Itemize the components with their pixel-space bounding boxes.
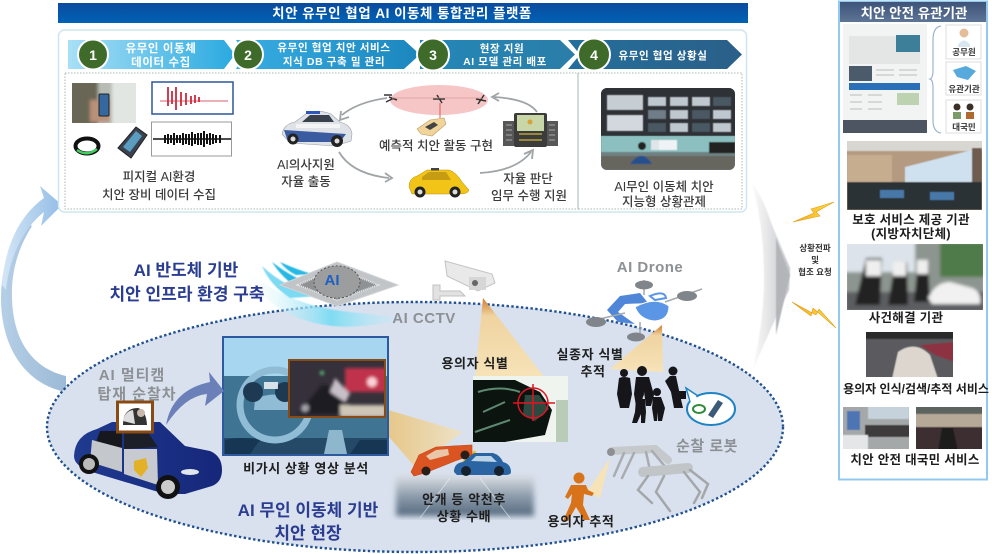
- inset: night scene video: [289, 360, 387, 417]
- text: AI chip heading: AI 반도체 기반: [134, 261, 239, 280]
- chart: black waveform: [152, 122, 232, 156]
- icon: AI chip: [280, 262, 398, 306]
- agencies header: [840, 2, 986, 22]
- text: physical AI: [102, 170, 216, 202]
- card: related agency: 유관기관: [948, 84, 980, 94]
- label: multicam patrol car: 탑재 순찰차: [97, 386, 177, 403]
- step 1 chevron: 1: [89, 47, 97, 63]
- label: field title: AI 무인 이동체 기반: [238, 501, 379, 520]
- text: loop labels: AI의사지원: [277, 158, 335, 172]
- text: protection service: [852, 212, 970, 241]
- text: physical AI: 치안 장비 데이터 수집: [102, 188, 216, 202]
- text: case resolution: 사건해결 기관: [869, 310, 943, 325]
- text: AI chip heading: 치안 인프라 환경 구축: [110, 285, 264, 304]
- text: situation relay: 및: [811, 255, 819, 265]
- step 2 chevron: 유무인 협업 치안 서비스: [277, 41, 391, 54]
- image: citizen service 2: [916, 407, 982, 449]
- text: situation relay: 협조 요청: [798, 267, 832, 277]
- text: control room label: 지능형 상황관제: [622, 194, 706, 209]
- label: field title: 치안 현장: [274, 524, 342, 543]
- icon: drone: [586, 280, 702, 372]
- text: situation relay: 상황전파: [799, 243, 831, 253]
- label: suspect id: 용의자 식별: [441, 356, 509, 371]
- step 3 chevron: 3: [429, 47, 437, 63]
- image: hand with phone: [72, 83, 136, 123]
- arrow: car to dashboard: [166, 372, 224, 425]
- text: loop labels: 예측적 치안 활동 구현: [379, 138, 493, 153]
- cone: dashboard to accident: [370, 410, 463, 467]
- label: bad weather: 안개 등 악천후: [422, 492, 506, 507]
- step 1 chevron: [68, 40, 235, 70]
- diagram: predictive policing loop: [277, 85, 567, 203]
- icon: crash cars: [411, 445, 511, 476]
- card: public official: [946, 25, 981, 59]
- icon: drones: [384, 95, 486, 118]
- arrows: loop arrows: [339, 93, 537, 182]
- icon: control device: [503, 113, 558, 147]
- image: suspect target: [473, 376, 568, 442]
- step 4 chevron: 유무인 협업 상황실: [618, 49, 708, 62]
- step 3 chevron: [417, 38, 575, 70]
- icon: CCTV: [433, 261, 495, 300]
- text: loop labels: 자율 판단: [503, 172, 553, 186]
- text: situation relay: [798, 243, 832, 277]
- step 2 chevron: 지식 DB 구축 밀 관리: [283, 55, 385, 68]
- robot 2: [638, 468, 708, 511]
- label: missing person: 추적: [580, 364, 606, 379]
- decoration: cyan waves: [240, 262, 405, 327]
- icon: small taxi: [417, 118, 446, 136]
- image: in-car dashboard: [223, 337, 388, 455]
- text: suspect service: 용의자 인식/검색/추적 서비스: [843, 382, 989, 396]
- label: missing person: 실종자 식별: [556, 347, 624, 362]
- label: bad weather: [422, 492, 506, 524]
- step 4 chevron: [568, 38, 742, 70]
- arrow: blue curved arrow from field to platform: [1, 186, 66, 392]
- text: loop labels: 임무 수행 지원: [491, 188, 567, 203]
- text: citizen service: 치안 안전 대국민 서비스: [850, 453, 980, 467]
- card: citizens: 대국민: [952, 122, 976, 132]
- card: public official: 공무원: [952, 47, 976, 57]
- step 4 chevron: 4: [590, 47, 598, 63]
- icon: AI chip: AI: [324, 272, 340, 289]
- label: patrol robot: 순찰 로봇: [676, 438, 738, 455]
- image: portal screenshot: [843, 24, 927, 133]
- image: citizen service 1: [843, 407, 909, 449]
- label: field title: [238, 501, 379, 543]
- icon: yellow autonomous car: [409, 168, 469, 198]
- label: multicam patrol car: AI 멀티캠: [99, 366, 165, 384]
- brace: [930, 26, 941, 133]
- robot 1: [607, 448, 668, 478]
- text: loop labels: [277, 138, 567, 203]
- title bar: [58, 3, 748, 23]
- icon: patrol robots: [607, 448, 708, 511]
- cone: CCTV view: [475, 298, 545, 378]
- title bar: 치안 유무인 협업 AI 이동체 통합관리 플랫폼: [272, 6, 532, 21]
- icon: orange running person: [563, 472, 594, 521]
- step 1 chevron: 유무인 이동체: [126, 42, 196, 55]
- image: operations center: [845, 139, 985, 212]
- label: bad weather: 상황 수배: [437, 509, 491, 524]
- text: control room label: AI무인 이동체 치안: [614, 180, 714, 194]
- text: AI chip heading: [110, 261, 264, 304]
- step 2 chevron: 2: [244, 47, 252, 63]
- card: related agency: [946, 62, 981, 95]
- text: protection service: (지방자치단체): [871, 227, 951, 241]
- step 3 chevron: 현장 지원: [480, 42, 524, 55]
- text: protection service: 보호 서비스 제공 기관: [852, 212, 970, 227]
- cone: robot to suspect: [587, 458, 610, 498]
- card: citizens: [946, 100, 981, 133]
- panel: safety agencies: [839, 2, 989, 480]
- icon: speech bubble band and phone: [686, 388, 735, 425]
- text: loop labels: 자율 출동: [281, 175, 331, 189]
- icon: smartphone: [118, 127, 147, 158]
- icon: people silhouettes: [617, 366, 686, 423]
- icon: police car: [282, 111, 352, 147]
- arrow: big gray flow arrow to agencies: [750, 180, 790, 372]
- icon: camera badge: [118, 402, 152, 432]
- label: suspect tracking: 용의자 추적: [547, 514, 615, 529]
- label: AI Drone: AI Drone: [617, 259, 683, 276]
- image: suspect cctv: [866, 332, 953, 377]
- label: AI CCTV: AI CCTV: [392, 310, 456, 327]
- image: foggy road: [396, 476, 534, 518]
- icon: lightning top: [793, 202, 834, 222]
- text: control room label: [614, 180, 714, 209]
- chart: red signal: [152, 82, 233, 114]
- panel: field ellipse: [47, 302, 783, 552]
- text: physical AI: 피지컬 AI환경: [123, 170, 195, 184]
- step 1 chevron: 데이터 수집: [131, 55, 191, 69]
- agencies header: 치안 안전 유관기관: [861, 6, 968, 21]
- label: missing person: [556, 347, 624, 379]
- step 2 chevron: [233, 40, 420, 70]
- label: multicam patrol car: [97, 366, 177, 403]
- step 3 chevron: AI 모델 관리 배포: [463, 55, 547, 68]
- zone: drones ellipse: [390, 85, 488, 115]
- label: video analysis: 비가시 상황 영상 분석: [243, 461, 369, 476]
- icon: lightning bottom: [792, 302, 836, 328]
- image: control room: [601, 88, 735, 170]
- icon: police car blue: [74, 402, 222, 499]
- icon: green wristband: [76, 138, 98, 154]
- image: police officers: [845, 242, 985, 312]
